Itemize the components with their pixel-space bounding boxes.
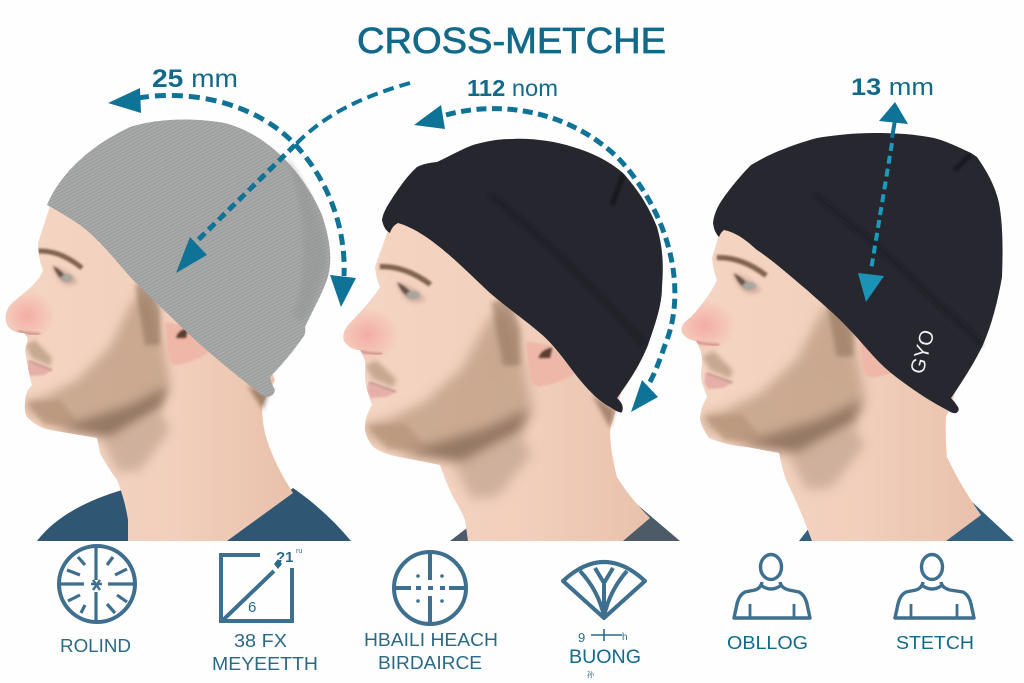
icon: square with diagonal: ru	[296, 548, 302, 555]
shirt	[799, 499, 1014, 541]
facial features	[335, 267, 576, 499]
black beanie	[713, 133, 1003, 413]
title: CROSS-METCHE	[357, 20, 666, 61]
icon: bust	[734, 554, 810, 618]
small glyph: 孙	[587, 670, 594, 679]
icon: square with diagonal: ?1	[276, 549, 294, 566]
arrow: 25 mm arc	[108, 88, 356, 307]
hair at nape	[247, 385, 268, 410]
label: HBAILI HEACH BIRDAIRCE: BIRDAIRCE	[378, 653, 482, 673]
small glyph row	[578, 629, 628, 645]
panel: grey beanie portrait	[0, 120, 351, 541]
label: OBLLOG: OBLLOG	[727, 632, 808, 653]
icon: crosshair	[394, 552, 466, 624]
face and neck	[6, 190, 293, 541]
label: 38 FX MEYEETTH	[212, 631, 318, 674]
panel: logo beanie portrait	[673, 133, 1014, 541]
measurement label: 13 mm: 13 mm	[851, 74, 934, 101]
panel: black beanie portrait	[335, 139, 680, 541]
black beanie	[382, 139, 663, 412]
label: HBAILI HEACH BIRDAIRCE: HBAILI HEACH	[364, 630, 498, 650]
label: BUONG: BUONG	[569, 647, 641, 668]
icon: round dial	[59, 546, 135, 622]
arrow: diagonal into beanie	[176, 83, 410, 273]
grey beanie	[47, 120, 330, 397]
icon: square with diagonal	[221, 548, 302, 621]
arrow: 112 nom arc	[414, 105, 675, 412]
arrow: 13 mm vertical	[858, 102, 908, 302]
small glyph row: 9	[578, 630, 585, 645]
label: 38 FX MEYEETTH: 38 FX	[234, 631, 287, 651]
hair at nape	[592, 395, 615, 428]
label: ROLIND: ROLIND	[60, 636, 131, 656]
measurement label: 112 nom: 112 nom	[467, 75, 558, 101]
beanie logo: GYO	[907, 328, 939, 376]
icon: bust stretch	[895, 554, 974, 618]
face and neck	[681, 190, 981, 541]
shirt	[37, 488, 351, 541]
facial features	[0, 251, 209, 472]
icon: fan	[563, 562, 645, 618]
measurement label: 25 mm: 25 mm	[152, 65, 238, 93]
label: 38 FX MEYEETTH: MEYEETTH	[212, 654, 318, 674]
small glyph row: h	[622, 632, 628, 643]
label: STETCH: STETCH	[896, 632, 974, 653]
shirt	[450, 501, 680, 541]
face and neck	[343, 190, 650, 541]
facial features	[673, 258, 908, 490]
label: HBAILI HEACH BIRDAIRCE	[364, 630, 498, 673]
icon: square with diagonal: 6	[248, 599, 256, 616]
